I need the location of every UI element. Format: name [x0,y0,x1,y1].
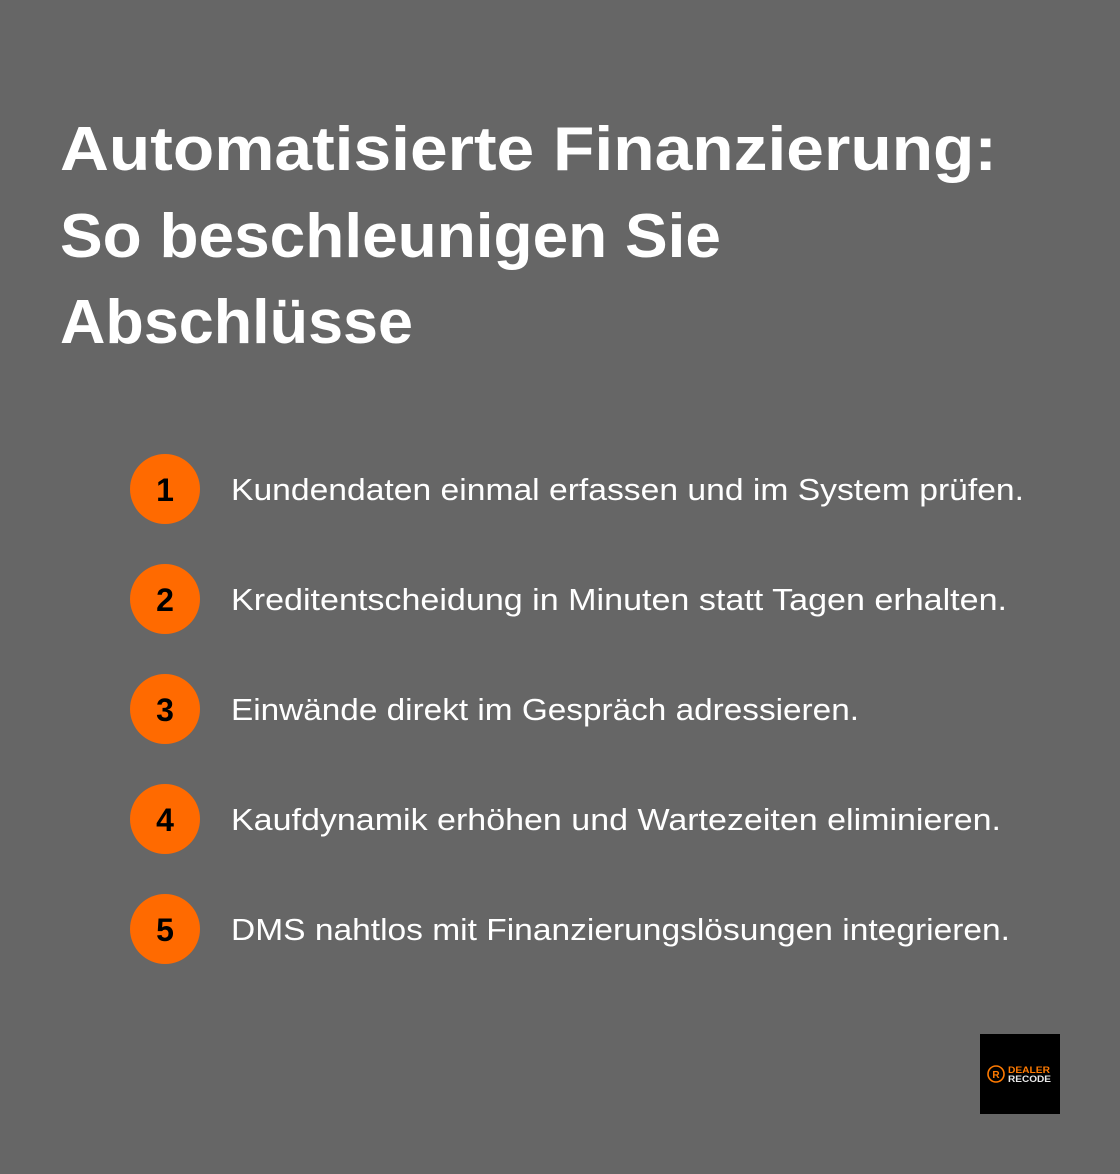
step 5: DMS nahtlos mit Finanzierungslösungen integrieren. [231,912,1010,947]
logo: Dealer Recode: DEALER [1008,1065,1051,1075]
step 1: 1 [156,472,174,508]
title: Abschlüsse [60,288,413,357]
step 1 [130,454,1024,524]
step 3 [130,674,859,744]
step 5: 5 [156,912,174,948]
step 4 [130,784,1001,854]
logo: Dealer Recode: RECODE [1008,1074,1051,1084]
title: Automatisierte Finanzierung: [60,115,997,184]
step 3: Einwände direkt im Gespräch adressieren. [231,692,859,727]
step list [130,454,1024,964]
step 2: Kreditentscheidung in Minuten statt Tagen erhalten. [231,582,1007,617]
logo: Dealer Recode: R [992,1070,1000,1081]
step 2: 2 [156,582,174,618]
step 4: Kaufdynamik erhöhen und Wartezeiten eliminieren. [231,802,1001,837]
title [60,115,997,357]
logo: Dealer Recode [980,1034,1060,1114]
step 5 [130,894,1010,964]
step 4: 4 [156,802,174,838]
step 2 [130,564,1007,634]
step 1: Kundendaten einmal erfassen und im System prüfen. [231,472,1024,507]
step 3: 3 [156,692,174,728]
title: So beschleunigen Sie [60,202,721,271]
